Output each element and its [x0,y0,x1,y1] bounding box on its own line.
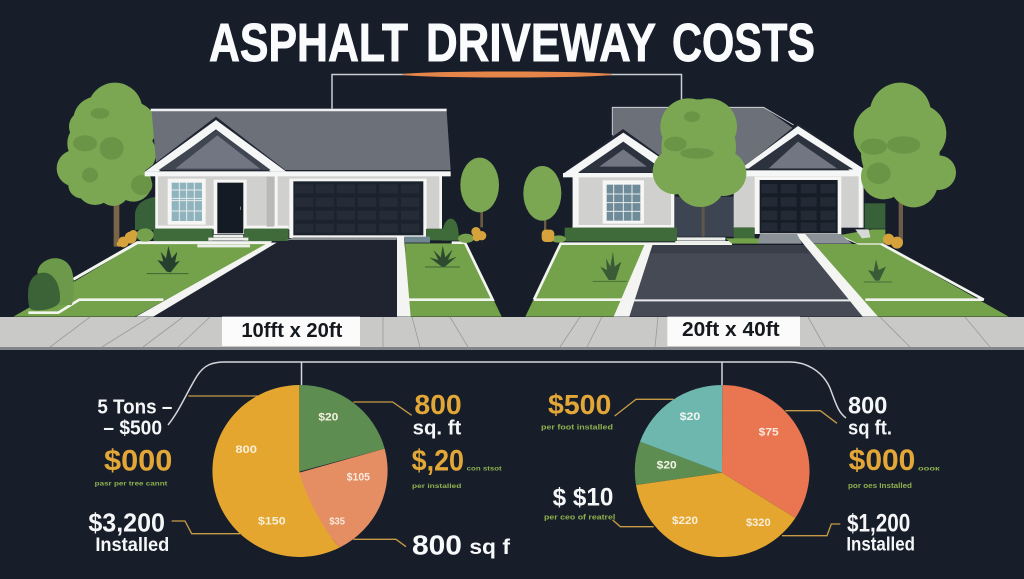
callout: $1,200 installed: $1,200 [847,510,910,538]
right gable [740,123,871,176]
plant: lawn right [864,259,892,282]
callout: 800 sq. ft: 800 [414,389,462,420]
pie: left: $150 [258,516,286,528]
left cost chart [88,385,511,561]
flowers: right [883,234,903,249]
title [209,13,815,73]
callout: $500: $500 [548,389,611,420]
callout: 800 sq ft.: sq ft. [848,416,892,439]
pie: left: $35 [329,517,345,528]
callout: 800 sq f [412,530,511,561]
callout: $3,200 installed: Installed [95,535,169,556]
title: DRIVEWAY [426,13,656,73]
shrub: behind house corner [135,197,157,230]
callout: 800 sq f: sq f [469,535,511,559]
callout: $ $10 [544,483,615,521]
title connector with orange underline [332,72,682,108]
pie: right: $20 [657,460,677,472]
pie: left: $20 [318,412,338,424]
eave [145,171,451,176]
lawn: right [405,243,502,317]
asphalt driveway [614,234,878,317]
sidewalk [0,317,1024,350]
callout: $500: per foot installed [541,423,613,432]
hedges and front steps [136,219,474,247]
callout: $500 [541,389,613,432]
pie: left: 800 [235,444,257,456]
roof outline [612,107,794,135]
flowers: left [117,230,137,247]
label: 20ft x 40ft: 20ft x 40ft [682,318,780,341]
callout: 800 sq ft. [848,392,892,439]
callout: $ $10: per ceo of reatrel [544,512,615,521]
pie: right: $220 [672,515,698,527]
house wall [155,176,442,229]
callout: 5 Tons: 5 Tons – [97,395,172,418]
callout: $3,200 installed [88,507,169,556]
driveway apron [757,234,852,244]
tree: small right [460,158,499,227]
roof [151,109,451,170]
plant: lawn right [425,245,460,267]
window [168,179,206,225]
house wall [573,176,864,237]
pie: right: $320 [746,517,771,529]
leader lines [613,399,840,536]
hedges and steps [551,227,870,244]
callout: 5 Tons: – $500 [103,417,162,440]
front door [214,180,247,234]
callout: $,20: per installed [412,483,461,490]
left gable [562,129,685,177]
callout: 800 sq. ft [413,389,462,439]
asphalt driveway [136,237,411,317]
right house scene [523,83,1009,346]
callout: $,20: $,20 [412,444,464,477]
pie: left [212,385,388,557]
callout: $000: pasr per tree cannt [95,481,168,488]
garage door [755,177,841,234]
pie: right: $75 [759,427,779,439]
pie: right [635,385,810,557]
callout: 5 Tons [97,395,172,440]
label: 10ft x 20ft: 10fft x 20ft [241,319,342,342]
callout: $,20 [412,444,502,490]
roof [612,107,812,170]
callout: $000: por oes Installed [848,483,912,490]
garage door [289,179,427,238]
label: 10ft x 20ft [222,317,360,346]
right cost chart [541,385,940,557]
flowers: left [542,230,554,242]
leader lines [172,396,412,547]
lawn: left [13,243,272,317]
callout: $ $10: $ $10 [553,483,613,511]
callout: $3,200 installed: $3,200 [88,507,165,537]
plant: lawn left [593,252,627,281]
tree: large right [854,83,956,242]
title: ASPHALT [209,13,408,73]
pie: left: $105 [347,471,370,483]
connector: top bracket between charts [168,362,846,425]
tree: small left [523,166,561,232]
shrub behind right corner [865,203,885,229]
lawn: left [525,243,732,317]
tree: centre [653,98,746,237]
title: COSTS [672,13,815,73]
callout: $000 [95,445,172,488]
pie: right: $20 [680,411,700,423]
callout: $,20: con stsot [467,467,502,473]
label: 20ft x 40ft [667,317,800,346]
plant: lawn left [147,246,188,274]
shrub: front left [28,258,74,310]
left house scene [13,83,502,346]
callout: 800 sq ft.: 800 [848,392,887,419]
callout: $1,200 installed: Installed [846,535,915,556]
callout: $000 [848,444,940,490]
gable [144,117,287,172]
window [603,180,644,224]
flowers: right [471,227,486,241]
lawn: right [814,229,1009,317]
callout: 800 sq f: 800 [412,530,462,561]
callout: $1,200 installed [846,510,915,556]
callout: $000: oooк [918,467,940,473]
callout: $000: $000 [104,445,172,478]
callout: 800 sq. ft: sq. ft [413,416,461,439]
callout: $000: $000 [849,444,915,477]
tree: large left [57,83,157,247]
